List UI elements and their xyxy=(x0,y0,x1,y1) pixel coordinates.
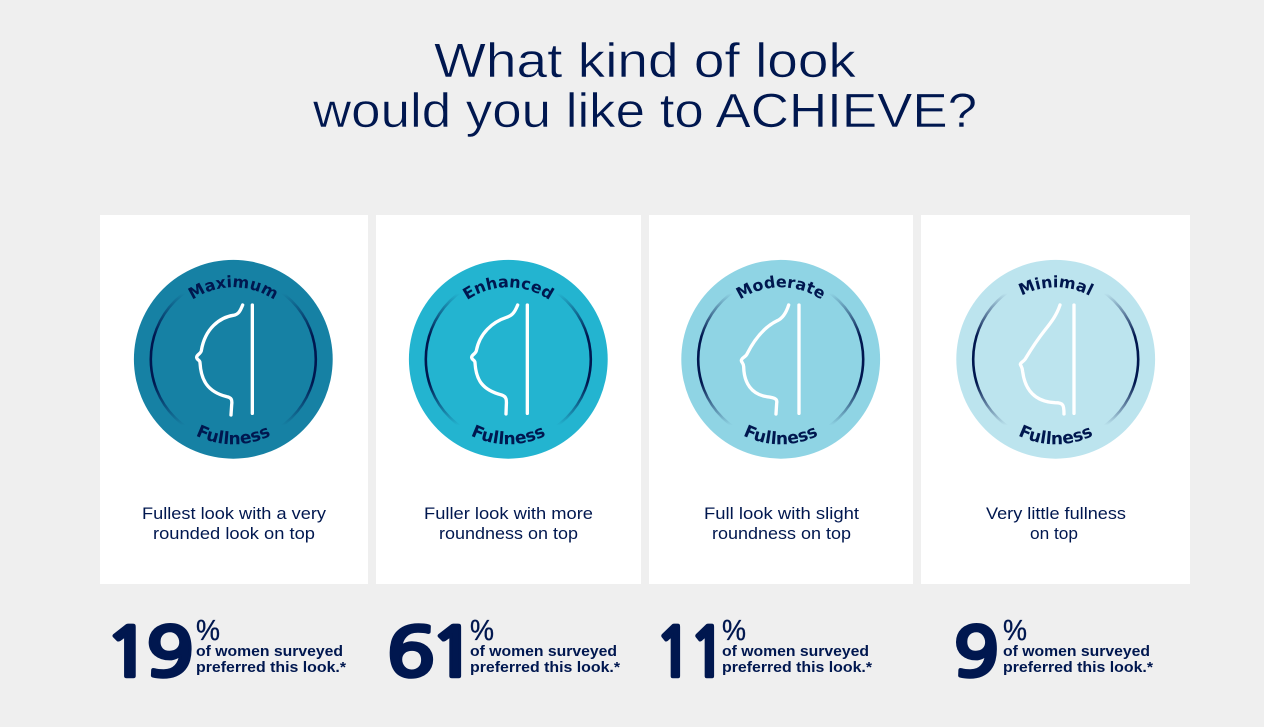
stat: 9 percent: of women surveyed xyxy=(1003,644,1150,660)
badge: maximum fullness: Maximum xyxy=(188,275,277,300)
description: enhanced: roundness on top xyxy=(439,524,578,543)
badge: enhanced fullness: Enhanced xyxy=(462,278,554,300)
description: maximum xyxy=(142,504,327,543)
stat: 11 percent: % xyxy=(722,615,746,647)
description: minimal xyxy=(986,504,1126,543)
badge: minimal fullness xyxy=(956,260,1156,459)
stat: 61 percent: 61 xyxy=(386,621,471,688)
description: minimal: Very little fullness xyxy=(986,504,1126,523)
icon: maximum profile xyxy=(197,305,252,415)
stat: 19 percent: preferred this look.* xyxy=(196,660,346,676)
badge: moderate fullness: Fullness xyxy=(744,424,817,444)
stat: 11 percent: 11 xyxy=(654,621,722,688)
title xyxy=(312,35,977,138)
badge: maximum fullness: Fullness xyxy=(196,424,270,444)
description: moderate xyxy=(704,504,859,543)
stat: 11 percent: preferred this look.* xyxy=(722,660,872,676)
panel: moderate fullness xyxy=(649,215,913,584)
panel: maximum fullness xyxy=(100,215,368,584)
stat: 9 percent: 9 xyxy=(953,621,996,688)
stat: 61 percent: % xyxy=(470,615,494,647)
icon: enhanced profile xyxy=(472,305,527,414)
badge: enhanced fullness: Fullness xyxy=(472,424,545,444)
stat: 11 percent: of women surveyed xyxy=(722,644,869,660)
stat: 61 percent: of women surveyed xyxy=(470,644,617,660)
description: maximum: rounded look on top xyxy=(153,524,315,543)
stat: 19 percent: 19 xyxy=(104,621,191,688)
title: would you like to ACHIEVE? xyxy=(312,85,977,138)
panel: minimal fullness xyxy=(921,215,1190,584)
stat: 9 percent: preferred this look.* xyxy=(1003,660,1153,676)
badge: enhanced fullness xyxy=(408,260,608,459)
description: enhanced: Fuller look with more xyxy=(424,504,593,523)
description: minimal: on top xyxy=(1030,524,1078,543)
title: What kind of look xyxy=(434,35,857,88)
description: moderate: roundness on top xyxy=(712,524,851,543)
stat: 11 percent xyxy=(654,615,872,688)
icon: minimal profile xyxy=(1020,305,1074,414)
stat: 61 percent xyxy=(386,615,620,688)
badge: minimal fullness: Minimal xyxy=(1018,275,1094,296)
description: moderate: Full look with slight xyxy=(704,504,859,523)
badge: moderate fullness: Moderate xyxy=(736,275,824,299)
description: maximum: Fullest look with a very xyxy=(142,504,327,523)
stat: 61 percent: preferred this look.* xyxy=(470,660,620,676)
badge: maximum fullness xyxy=(134,260,333,459)
badge: minimal fullness: Fullness xyxy=(1019,424,1092,444)
stat: 9 percent: % xyxy=(1003,615,1027,647)
panel: enhanced fullness xyxy=(376,215,641,584)
stat: 19 percent: % xyxy=(196,615,220,647)
stat: 9 percent xyxy=(953,615,1153,688)
icon: moderate profile xyxy=(741,305,799,414)
stat: 19 percent: of women surveyed xyxy=(196,644,343,660)
description: enhanced xyxy=(424,504,593,543)
badge: moderate fullness xyxy=(681,260,880,459)
stat: 19 percent xyxy=(104,615,346,688)
